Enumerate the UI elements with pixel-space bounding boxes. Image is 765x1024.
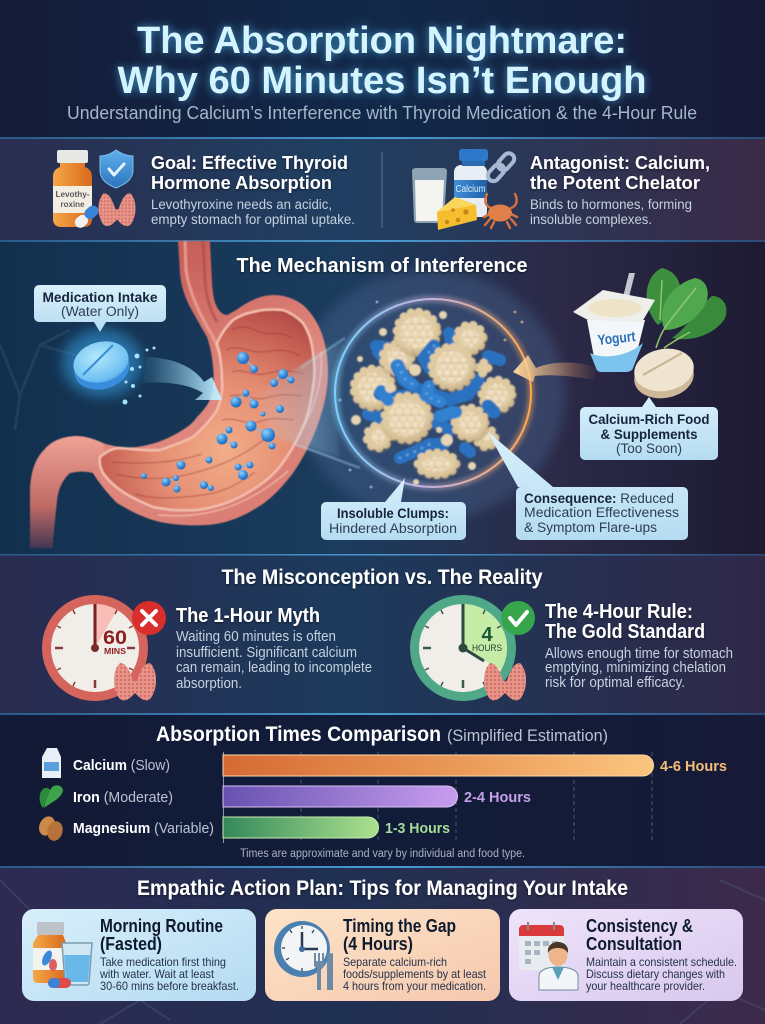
goal text: empty stomach for optimal uptake. <box>151 212 355 227</box>
callout: consequence: & Symptom Flare-ups <box>524 520 657 535</box>
molecules: dissolved medication <box>141 352 294 492</box>
bar: iron <box>223 786 531 807</box>
card: timing the gap <box>265 909 500 1001</box>
icon: yogurt, spinach and calcium tablet <box>573 268 727 403</box>
reality text block: Allows enough time for stomach <box>545 646 733 662</box>
icon: levothyroxine bottle and thyroid: Levothy- <box>56 189 90 199</box>
morning routine text: Morning Routine <box>100 916 223 936</box>
antagonist heading <box>530 152 710 193</box>
callout: insoluble clumps: Insoluble Clumps: <box>337 506 449 521</box>
bar: calcium: 4-6 Hours <box>660 758 727 775</box>
timing the gap text: foods/supplements by at least <box>343 967 487 981</box>
icon: 4 hour clock: HOURS <box>472 643 502 653</box>
heading: absorption times <box>156 723 608 746</box>
icon: 60 minute clock <box>42 595 166 701</box>
timing the gap text: Timing the Gap <box>343 916 456 936</box>
bar chart <box>223 752 727 843</box>
reality text block: The 4-Hour Rule: <box>545 600 693 623</box>
myth text block <box>176 604 372 692</box>
bar: calcium <box>223 755 727 776</box>
arrow: calcium to clump <box>513 355 595 382</box>
consistency text: Consultation <box>586 934 682 954</box>
consistency text: Maintain a consistent schedule. <box>586 955 737 969</box>
panel: goal and antagonist <box>0 137 765 242</box>
title: Why 60 Minutes Isn’t Enough <box>118 60 646 102</box>
icon: calcium sources: Calcium <box>456 184 486 195</box>
row labels: Calcium (Slow) <box>73 757 170 774</box>
antagonist heading: Antagonist: Calcium, <box>530 152 710 173</box>
panel: misconception vs reality <box>0 556 765 715</box>
morning routine text: 30-60 mins before breakfast. <box>100 979 239 993</box>
callout: medication intake: Medication Intake <box>42 290 158 305</box>
heading: action plan: Empathic Action Plan: Tips for Managing Your Intake <box>137 876 628 900</box>
insoluble clump illustration <box>335 299 531 488</box>
callout: calcium-rich food: & Supplements <box>600 427 698 442</box>
goal heading: Goal: Effective Thyroid <box>151 152 348 173</box>
icon: 4 hour clock: 4 <box>481 624 493 646</box>
subtitle: Understanding Calcium’s Interference with Thyroid Medication & the 4-Hour Rule <box>67 103 697 123</box>
goal text <box>151 197 355 227</box>
myth text block: The 1-Hour Myth <box>176 604 320 627</box>
icon: 60 minute clock: MINS <box>104 646 126 656</box>
morning routine text: with water. Wait at least <box>99 967 215 981</box>
icon: 4 hour clock <box>410 595 535 701</box>
heading: misconception: The Misconception vs. The Reality <box>222 566 543 589</box>
myth text block: can remain, leading to incomplete <box>176 660 372 676</box>
myth text block: insufficient. Significant calcium <box>176 645 357 661</box>
row labels: Iron (Moderate) <box>73 789 173 806</box>
callout: consequence <box>487 431 688 540</box>
callout: insoluble clumps <box>321 478 466 540</box>
stomach illustration <box>30 241 328 548</box>
callout: consequence: Medication Effectiveness <box>524 505 679 520</box>
icon: calendar and doctor <box>519 922 578 990</box>
goal heading <box>151 152 348 193</box>
myth text block: Waiting 60 minutes is often <box>176 629 336 645</box>
reality text block: emptying, minimizing chelation <box>545 660 726 676</box>
panel: action plan <box>0 866 765 1024</box>
reality text block: risk for optimal efficacy. <box>545 675 685 691</box>
callout: calcium-rich food <box>580 397 718 460</box>
icon: levothyroxine bottle and thyroid <box>53 150 135 230</box>
title <box>118 20 646 102</box>
timing the gap text: (4 Hours) <box>343 934 413 954</box>
icon: clock with cutlery <box>274 921 333 990</box>
icon: milk carton <box>42 748 61 778</box>
icon: almonds <box>36 814 65 843</box>
row labels <box>73 757 214 837</box>
icon: spinach <box>40 785 63 808</box>
antagonist heading: the Potent Chelator <box>530 172 700 193</box>
card: consistency and consultation <box>509 909 743 1001</box>
morning routine text: Take medication first thing <box>100 955 226 969</box>
icon: levothyroxine bottle and thyroid: roxine <box>60 199 85 209</box>
card: morning routine <box>22 909 256 1001</box>
heading: mechanism: The Mechanism of Interference <box>236 254 528 277</box>
reality text block <box>545 600 733 691</box>
callout: medication intake: (Water Only) <box>61 304 139 319</box>
consistency text: Consistency & <box>586 916 693 936</box>
antagonist text: insoluble complexes. <box>530 212 652 227</box>
consistency text: your healthcare provider. <box>586 979 705 993</box>
antagonist text <box>530 197 692 227</box>
panel: absorption times comparison <box>0 715 765 866</box>
header band <box>0 0 765 137</box>
bar: magnesium <box>223 817 450 838</box>
reality text block: The Gold Standard <box>545 620 705 643</box>
timing the gap text <box>343 916 487 993</box>
consistency text <box>586 916 737 993</box>
consistency text: Discuss dietary changes with <box>586 967 725 981</box>
timing the gap text: 4 hours from your medication. <box>343 979 486 993</box>
callout: calcium-rich food: Calcium-Rich Food <box>588 412 710 427</box>
icon: 60 minute clock: 60 <box>103 628 127 649</box>
callout: medication intake <box>34 285 166 332</box>
callout: insoluble clumps: Hindered Absorption <box>329 521 457 536</box>
goal text: Levothyroxine needs an acidic, <box>151 197 332 212</box>
icon: dissolving tablet <box>62 329 156 404</box>
timing the gap text: Separate calcium-rich <box>343 955 447 969</box>
panel: mechanism of interference <box>0 241 765 556</box>
heading: absorption times: Absorption Times Comparison <box>156 723 441 746</box>
morning routine text: (Fasted) <box>100 934 162 954</box>
callout: calcium-rich food: (Too Soon) <box>616 441 682 456</box>
icon: calcium sources <box>412 149 517 230</box>
light beams <box>253 338 360 468</box>
arrow: medication to stomach <box>143 357 222 400</box>
icon: yogurt, spinach and calcium tablet: Yogurt <box>597 329 636 349</box>
chart note: Times are approximate and vary by individual and food type. <box>240 848 525 860</box>
bar: iron: 2-4 Hours <box>464 789 531 806</box>
goal heading: Hormone Absorption <box>151 172 332 193</box>
morning routine text <box>99 916 239 993</box>
antagonist text: Binds to hormones, forming <box>530 197 692 212</box>
myth text block: absorption. <box>176 676 242 692</box>
row labels: Magnesium (Variable) <box>73 820 214 837</box>
heading: absorption times: (Simplified Estimation) <box>447 727 608 745</box>
callout: consequence: Consequence: Reduced <box>524 491 674 506</box>
icon: medication and water <box>33 922 92 988</box>
title: The Absorption Nightmare: <box>137 20 627 62</box>
bar: magnesium: 1-3 Hours <box>385 820 450 837</box>
